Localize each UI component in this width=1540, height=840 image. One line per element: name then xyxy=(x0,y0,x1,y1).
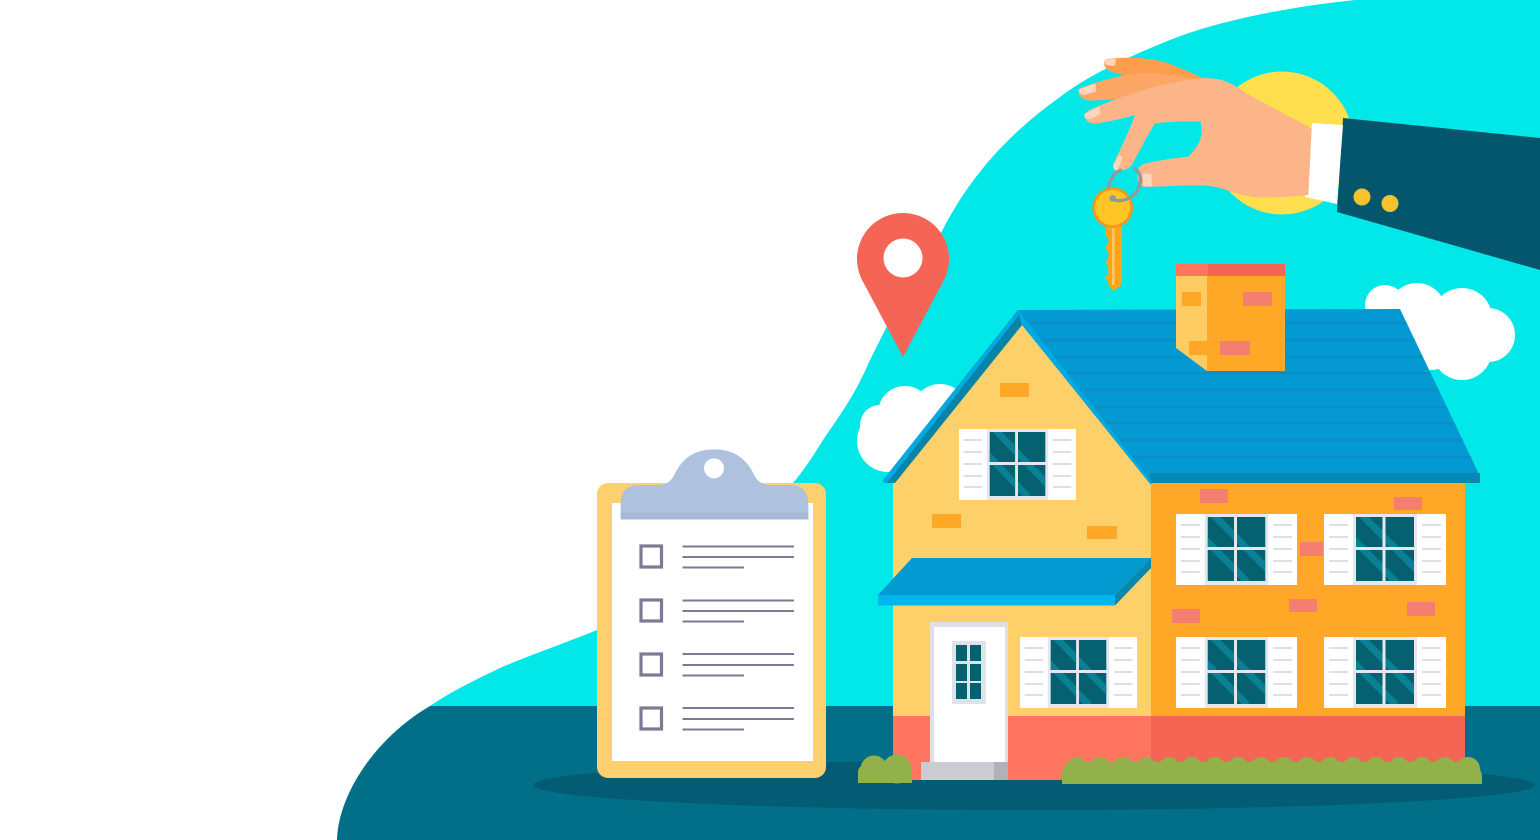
right wing wall xyxy=(1150,483,1465,780)
cloud: left xyxy=(857,384,968,472)
hand xyxy=(1079,58,1312,198)
key shaft xyxy=(1104,227,1122,291)
key ring xyxy=(1108,168,1140,201)
top finger xyxy=(1104,58,1205,85)
clipboard clip xyxy=(621,449,808,519)
wall bricks xyxy=(1172,489,1435,623)
front door xyxy=(921,622,1008,780)
gable bricks xyxy=(932,383,1117,539)
middle finger xyxy=(1079,73,1198,101)
porch awning xyxy=(878,558,1151,606)
windows xyxy=(959,429,1446,708)
jacket sleeve xyxy=(1337,118,1540,270)
dark teal ground xyxy=(337,706,1540,840)
shirt cuff xyxy=(1305,123,1343,204)
gable rake right xyxy=(1018,310,1151,485)
bushes: right hedge xyxy=(1062,757,1482,784)
bushes: left xyxy=(858,754,912,784)
ground shadow xyxy=(533,760,1535,810)
sun xyxy=(1210,72,1354,214)
location pin xyxy=(857,213,949,357)
chimney xyxy=(1176,264,1285,371)
main roof xyxy=(1000,309,1480,483)
cyan background blob xyxy=(430,0,1540,706)
gable rake left xyxy=(883,310,1022,483)
illustration: handing over house keys xyxy=(337,0,1540,840)
cloud: right xyxy=(1365,283,1515,380)
clipboard xyxy=(597,449,826,778)
palm, ring and index fingers, thumb xyxy=(1085,78,1312,198)
sleeve buttons xyxy=(1354,188,1370,206)
fingernails xyxy=(1079,59,1152,187)
key xyxy=(1094,168,1140,291)
pin hole xyxy=(884,238,922,278)
checklist rows xyxy=(641,546,794,730)
door step xyxy=(921,762,994,780)
key head xyxy=(1094,189,1132,227)
gable wall xyxy=(893,325,1151,780)
